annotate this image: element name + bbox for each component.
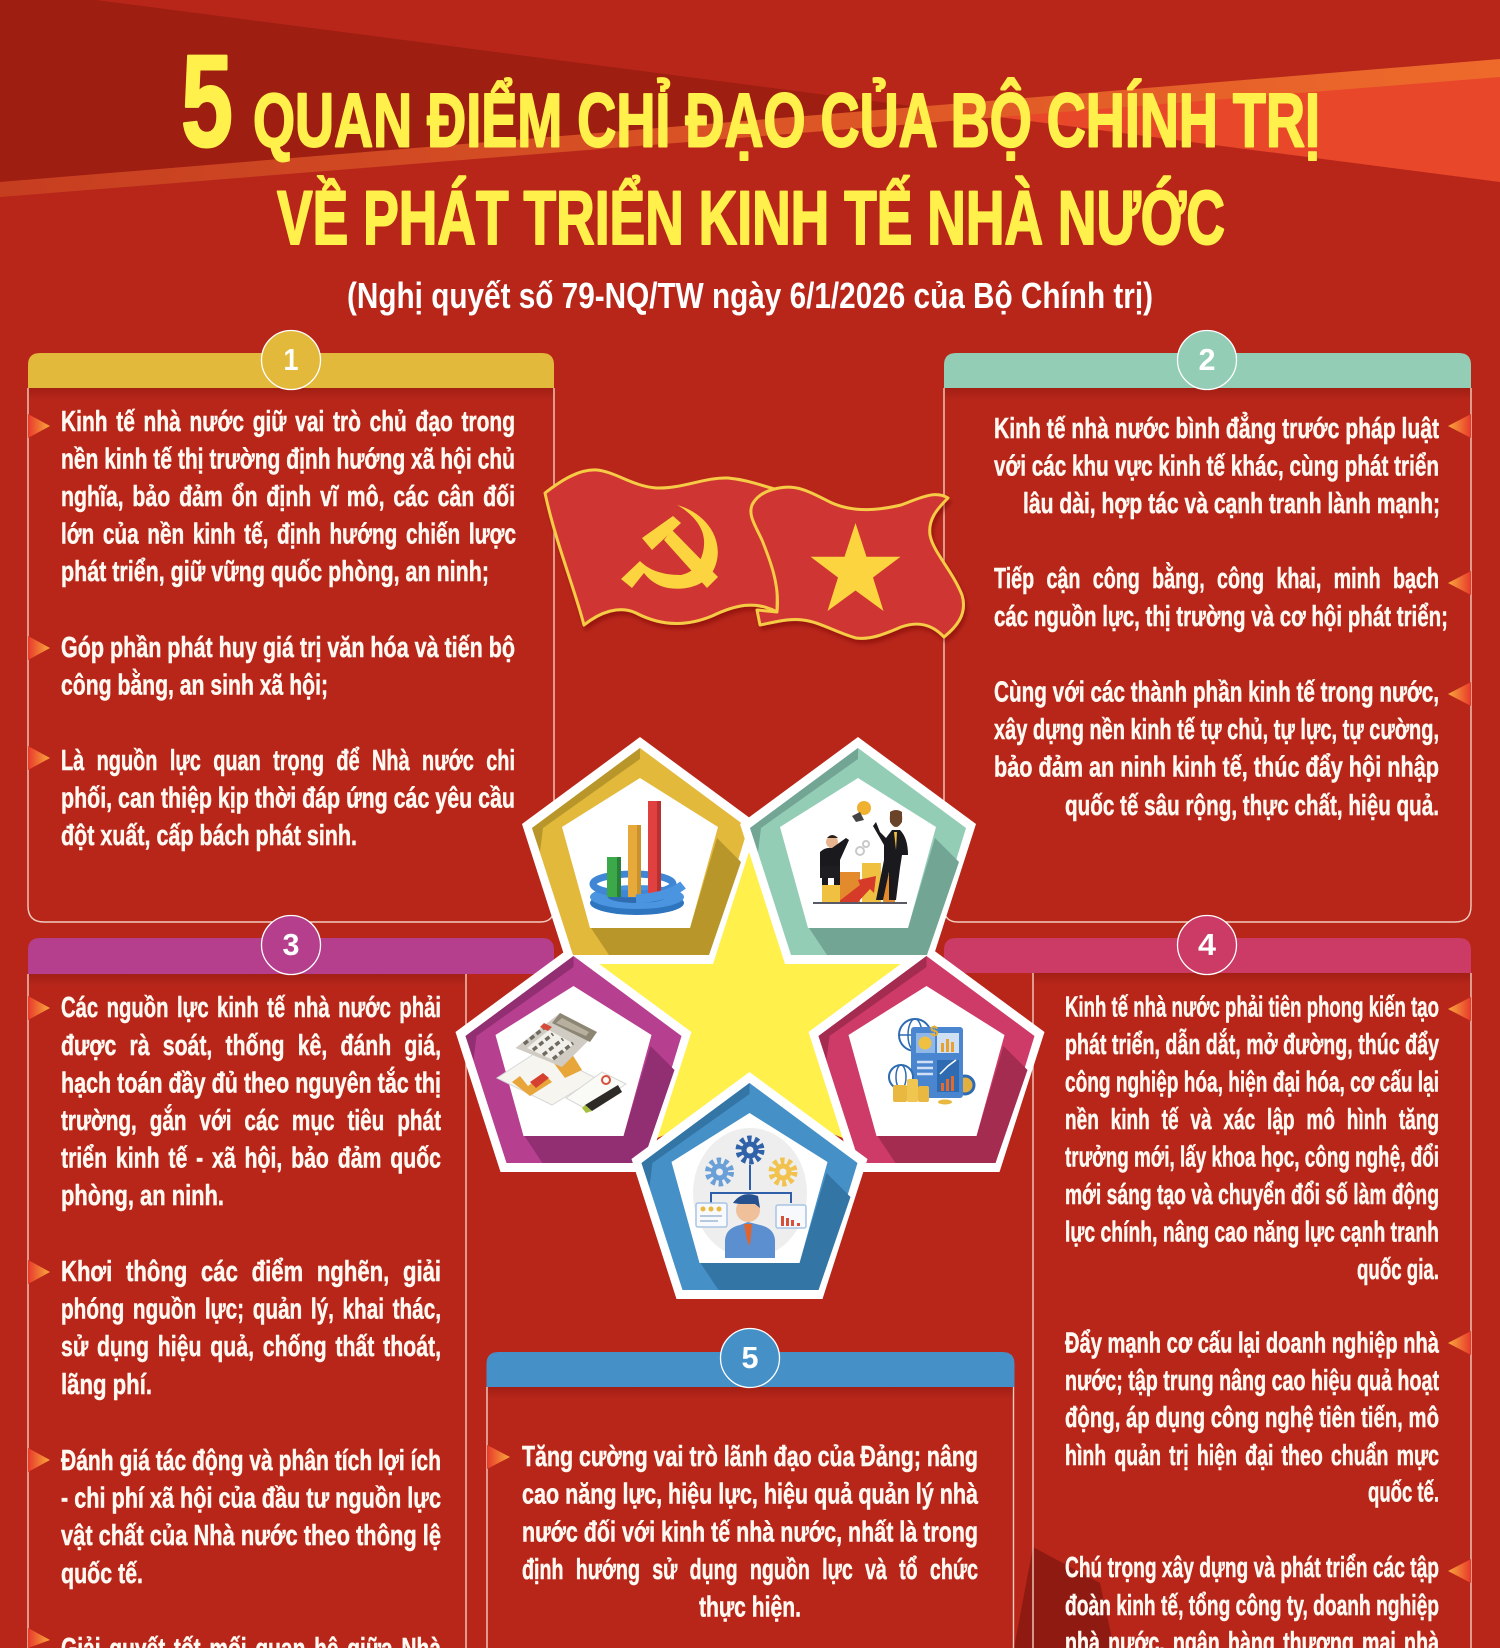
panel 1 text: phát triển, giữ vững quốc phòng, an ninh; — [61, 556, 489, 588]
icon: manager with gears and cards — [693, 1128, 807, 1258]
panel 5 — [486, 1328, 1014, 1648]
panel 5 text: Tăng cường vai trò lãnh đạo của Đảng; nâng — [522, 1441, 978, 1473]
panel 3: 3 — [282, 927, 300, 962]
panel 1 text: nghĩa, bảo đảm ổn định vĩ mô, các cân đối — [61, 481, 515, 513]
panel 1 text: Góp phần phát huy giá trị văn hóa và tiến bộ — [61, 632, 515, 664]
ring corner of pentagon 1 — [570, 943, 592, 955]
panel 3 text: phóng nguồn lực; quản lý, khai thác, — [61, 1294, 441, 1326]
icon: 3D bars and rings — [590, 801, 684, 915]
panel 5 text: thực hiện. — [699, 1592, 801, 1624]
panel 1 text: lớn của nền kinh tế, định hướng chiến lược — [61, 518, 516, 550]
panel 4 text: quốc gia. — [1357, 1254, 1439, 1286]
panel 5 text: cao năng lực, hiệu lực, hiệu quả quản lý nhà — [522, 1478, 979, 1510]
hammer and sickle — [621, 505, 718, 589]
panel 1 text: công bằng, an sinh xã hội; — [61, 668, 328, 702]
panel 3 text: hạch toán đầy đủ theo nguyên tắc thị — [61, 1066, 441, 1100]
pentagon 3: calculator icon — [456, 945, 692, 1172]
pentagon 1: chart icon — [522, 737, 758, 964]
panel 5 text — [522, 1441, 979, 1624]
panel 3 text: trường, gắn với các mục tiêu phát — [61, 1103, 441, 1137]
panel 4 text — [1065, 992, 1440, 1648]
panel 3 text: phòng, an ninh. — [61, 1180, 224, 1212]
panel 1 — [28, 330, 554, 922]
flags — [545, 470, 964, 638]
panel 3 text: được rà soát, thống kê, đánh giá, — [61, 1030, 441, 1062]
panel 3 text: lãng phí. — [61, 1369, 152, 1401]
party flag — [545, 470, 779, 625]
panel 3 text: Khơi thông các điểm nghẽn, giải — [61, 1256, 441, 1288]
panel 4 text: quốc tế. — [1368, 1476, 1439, 1508]
panel 1: 1 — [284, 342, 298, 377]
title: 5 — [181, 27, 233, 174]
panel 3 text — [61, 992, 442, 1648]
icon: calculator and reports — [497, 1013, 626, 1113]
pentagon 4: finance report icon — [808, 945, 1044, 1172]
panel 3 text: Đánh giá tác động và phân tích lợi ích — [61, 1445, 441, 1477]
panel 2: 2 — [1198, 342, 1216, 377]
pentagon 5: manager icon — [632, 1072, 868, 1299]
panel 1 text — [61, 406, 516, 852]
panel 3 text: quốc tế. — [61, 1558, 143, 1590]
panel 3 text: triển kinh tế - xã hội, bảo đảm quốc — [61, 1142, 441, 1174]
central star — [590, 840, 910, 1145]
panel 3 text: - chi phí xã hội của đầu tư nguồn lực — [61, 1482, 441, 1514]
ring corner of pentagon 2 — [908, 943, 930, 955]
icon: document with charts, globes and coins: $ — [930, 1023, 939, 1040]
star on flag — [810, 523, 900, 611]
icon: two businessmen with trophy — [813, 801, 908, 904]
vietnam flag — [751, 487, 964, 638]
subtitle: (Nghị quyết số 79-NQ/TW ngày 6/1/2026 của Bộ Chính trị) — [347, 275, 1153, 316]
panel 2 — [944, 330, 1471, 922]
panel 3 text: sử dụng hiệu quả, chống thất thoát, — [61, 1331, 441, 1363]
panel 3 text: Các nguồn lực kinh tế nhà nước phải — [61, 992, 441, 1024]
panel 5: 5 — [742, 1340, 758, 1375]
panel 1 text: Kinh tế nhà nước giữ vai trò chủ đạo trong — [61, 406, 515, 438]
pentagon 2: businessmen icon — [740, 737, 976, 964]
panel 3 text: vật chất của Nhà nước theo thông lệ — [61, 1520, 441, 1552]
panel 1 text: đột xuất, cấp bách phát sinh. — [61, 820, 357, 852]
icon: document with charts, globes and coins — [889, 1019, 974, 1104]
panel 5 text: định hướng sử dụng nguồn lực và tổ chức — [522, 1554, 978, 1586]
panel 2 text — [994, 411, 1448, 822]
panel 4: 4 — [1198, 927, 1217, 962]
panel 1 text: Là nguồn lực quan trọng để Nhà nước chi — [61, 745, 515, 777]
panel 4 — [944, 916, 1471, 1648]
panel 3 — [28, 916, 554, 1648]
panel 1 text: phối, can thiệp kịp thời đáp ứng các yêu cầu — [61, 782, 515, 814]
panel 1 text: nền kinh tế thị trường định hướng xã hội chủ — [61, 444, 515, 476]
panel 5 text: nước đối với kinh tế nhà nước, nhất là trong — [522, 1516, 978, 1548]
title — [181, 27, 1320, 261]
